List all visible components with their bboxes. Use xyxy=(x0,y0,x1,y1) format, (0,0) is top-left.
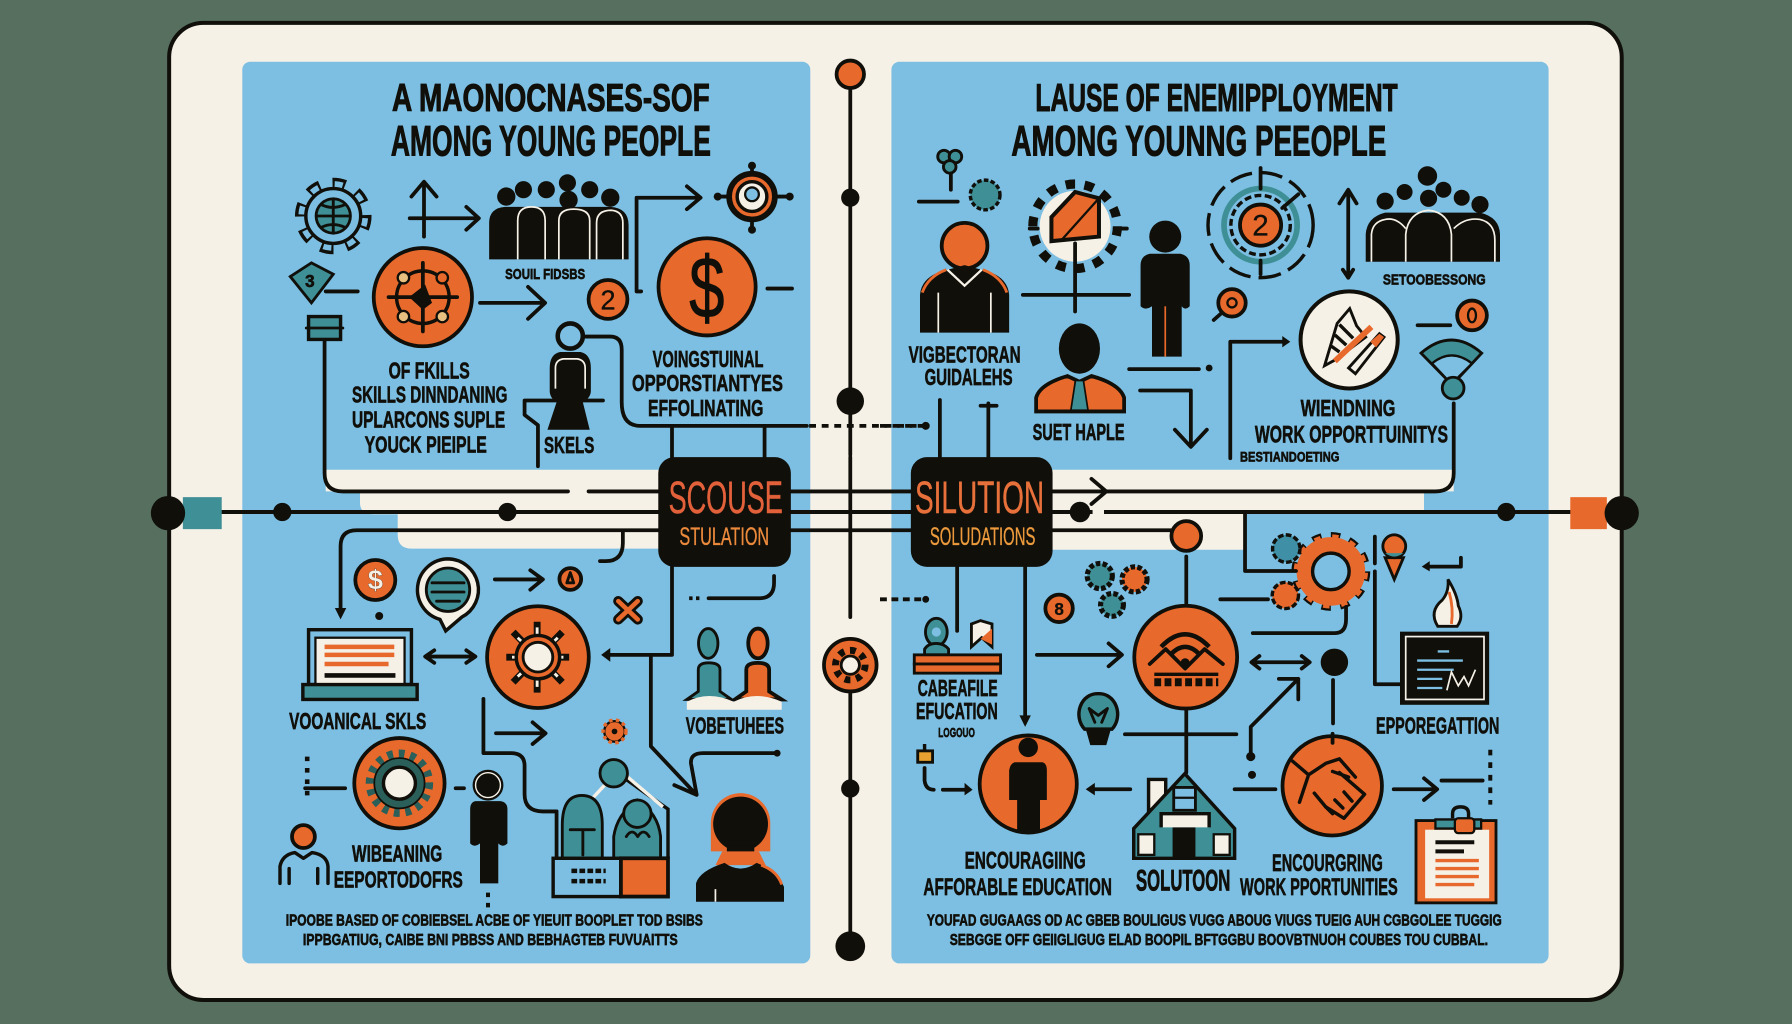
label: careable education xyxy=(916,675,998,740)
box: solution: SILUTION xyxy=(915,472,1044,523)
label: solution: SOLUTOON xyxy=(1136,864,1230,897)
icon: people group right xyxy=(1366,166,1500,262)
label: epporegation: EPPOREGATTION xyxy=(1376,713,1499,739)
label: careable education: CABEAFILE xyxy=(918,675,998,701)
text: widening opportunities xyxy=(334,841,463,892)
arrow: vertical double xyxy=(1339,190,1357,278)
heading: top right: AMONG YOUNNG PEEOPLE xyxy=(1011,117,1386,164)
icon: magnifier xyxy=(1214,289,1246,320)
label: group: SOUIL FIDSBS xyxy=(505,267,585,283)
label: careable education: LOGOUO xyxy=(938,726,975,740)
panel background: solutions xyxy=(891,62,1549,963)
icon: small person xyxy=(280,825,328,883)
arrow: pointing to gear xyxy=(1426,558,1461,567)
panel background: causes xyxy=(242,62,810,963)
icon: teal pendant xyxy=(290,263,358,303)
icon: target with 2 xyxy=(1208,168,1313,278)
icon: standing person with connectors xyxy=(525,323,928,466)
icon: number token xyxy=(1045,595,1073,622)
box: scouse: STULATION xyxy=(679,523,769,551)
text: skills xyxy=(352,357,507,458)
label: vocational skills: VOOANICAL SKLS xyxy=(289,708,426,734)
footer text: left xyxy=(286,913,703,949)
text: widening work opportunities: WORK OPPORTTUINITYS xyxy=(1255,421,1448,448)
connector: house to handshake xyxy=(1235,679,1298,789)
label: group right: SETOOBESSONG xyxy=(1383,273,1486,289)
arrow: to small token xyxy=(495,570,543,590)
text: encouraging affordable education xyxy=(923,848,1112,901)
icon: ice cream marker xyxy=(1383,535,1406,579)
icon: two figures xyxy=(687,629,782,710)
horizontal connectors xyxy=(183,339,1621,619)
icon: standing person xyxy=(1141,221,1190,357)
text: skills: UPLARCONS SUPLE xyxy=(352,406,505,432)
text: encouraging affordable education: AFFORABLE EDUCATION xyxy=(923,874,1112,901)
icon: clipboard xyxy=(1416,807,1496,903)
heading: top right xyxy=(1011,77,1398,164)
text: vocational opportunities: EFFOLINATING xyxy=(648,395,763,421)
icon: dollar coin xyxy=(659,238,792,337)
end marker: teal left xyxy=(151,496,222,530)
arrowhead xyxy=(1086,783,1095,795)
icon: teal pendant: 3 xyxy=(305,271,315,291)
arrow: cross xyxy=(410,182,479,237)
icon: person headphones xyxy=(696,793,784,902)
connector: chart xyxy=(1375,537,1402,684)
icon: number 2 badge xyxy=(589,280,627,319)
text: encouraging work opportunities: ENCOURGRING xyxy=(1272,850,1383,877)
icon: cream circle with pen xyxy=(1301,291,1398,388)
icon: dark chart panel xyxy=(1400,632,1489,705)
icon: plug with hook xyxy=(918,744,973,795)
heading: top left: A MAONOCNASES-SOF xyxy=(392,77,710,120)
arrow: elbow to target xyxy=(637,186,701,291)
icon: cluster of gears xyxy=(1087,563,1147,616)
icon: central gear node xyxy=(824,639,877,691)
heading: top left xyxy=(391,77,711,164)
icon: target with bulb xyxy=(714,162,794,234)
icon: house xyxy=(1134,774,1235,858)
central vertical timeline xyxy=(835,61,865,961)
icon: sunburst house xyxy=(1023,184,1129,312)
text: skills: YOUCK PIEIPLE xyxy=(365,432,487,458)
connector: elbow xyxy=(483,699,557,811)
icon: laptop xyxy=(303,630,417,699)
text: widening work opportunities: BESTIANDOETING xyxy=(1240,450,1339,465)
footer text: left: IPOOBE BASED OF COBIEBSEL ACBE OF YIEUIT BOOPLET TOD BSIBS xyxy=(286,913,703,930)
connector: hook xyxy=(600,531,623,561)
icon: small orange gear xyxy=(603,720,626,743)
label: skels: SKELS xyxy=(544,432,594,458)
arrow: to person xyxy=(480,287,545,319)
icon: double arrow and black node xyxy=(1251,649,1348,723)
connectors: solution box down xyxy=(880,567,1031,727)
label: vibrant guidance: GUIDALEHS xyxy=(925,364,1013,390)
panel: bottom left solutions xyxy=(280,531,784,949)
connector nodes xyxy=(273,502,1515,551)
icon: handshake circle xyxy=(1283,734,1382,836)
arrow and dashes right xyxy=(1394,750,1490,805)
arrowhead xyxy=(1422,561,1430,571)
icon: speech bubble xyxy=(417,559,478,631)
icon: orange network circle xyxy=(487,606,589,708)
heading: top left: AMONG YOUNG PEOPLE xyxy=(391,117,711,164)
icon: big gear xyxy=(1298,538,1364,605)
icon: wifi house circle xyxy=(1134,557,1237,709)
icon: light bulb xyxy=(1079,694,1118,745)
box: solution: SOLUDATIONS xyxy=(930,523,1035,551)
icon: teal gear circle xyxy=(354,738,445,828)
arrow: to wifi xyxy=(1037,643,1122,666)
icon: teacher at desk xyxy=(914,618,1001,673)
icon: dollar token: $ xyxy=(368,565,383,596)
heading: top right: LAUSE OF ENEMIPPLOYMENT xyxy=(1035,77,1398,120)
icon: orange x xyxy=(618,601,638,619)
text: widening work opportunities xyxy=(1240,395,1448,465)
text: encouraging work opportunities xyxy=(1240,850,1398,901)
text: encouraging work opportunities: WORK PPORTUNITIES xyxy=(1240,874,1398,901)
icon: number token: 8 xyxy=(1054,599,1064,619)
text: skills: SKILLS DINNDANING xyxy=(352,381,507,407)
box: solution xyxy=(911,457,1053,567)
label: opportunities: VOBETUHEES xyxy=(686,712,784,738)
box: scouse: SCOUSE xyxy=(669,472,783,523)
icon: book stack xyxy=(306,317,343,339)
footer text: left: IPPBGATIUG, CAIBE BNI PBBSS AND BEBHAGTEB FUVUAITTS xyxy=(303,932,678,949)
arrow: double laptop to virus xyxy=(425,650,475,663)
label: vibrant guidance: VIGBECTORAN xyxy=(909,341,1021,367)
icon: person orange head xyxy=(920,223,1009,333)
label: careable education: EFUCATION xyxy=(916,698,998,724)
footer text: right: SEBGGE OFF GEIIGLIGUG ELAD BOOPIL BFTGGBU BOOVBTNUOH COUBES TOU CUBBAL. xyxy=(950,932,1488,949)
icon: dollar token xyxy=(355,560,395,620)
icon: flame xyxy=(1434,579,1461,626)
icon: man with tie xyxy=(1036,323,1124,411)
panel: top right causes xyxy=(880,77,1500,465)
arrow: mid xyxy=(496,722,546,744)
footer text: right: YOUFAD GUGAAGS OD AC GBEB BOULIGUS VUGG ABOUG VIUGS TUEIG AUH CGBGOLEE TUGGIG xyxy=(927,913,1502,930)
end marker: orange right xyxy=(1570,496,1639,530)
card xyxy=(169,23,1622,1000)
connectors: big gear xyxy=(1220,513,1346,633)
text: vocational opportunities: OPPORSTIANTYES xyxy=(632,370,783,396)
icon: small token xyxy=(559,568,581,590)
icon: dollar coin: $ xyxy=(689,240,725,337)
text: skills: OF FKILLS xyxy=(389,357,470,383)
icon: teal wifi fan xyxy=(1421,340,1482,399)
arrows: mid right xyxy=(1129,336,1290,458)
panel: bottom right solutions xyxy=(880,513,1502,949)
arrow: house to person xyxy=(1090,788,1130,791)
label: vibrant guidance xyxy=(909,341,1021,390)
icon: people group xyxy=(489,174,629,259)
panel: top left causes xyxy=(290,77,928,466)
box: scouse xyxy=(658,457,791,567)
icon: small plant xyxy=(919,150,1000,210)
icon: target with 2: 2 xyxy=(1252,209,1269,242)
text: encouraging affordable education: ENCOURAGIING xyxy=(965,848,1086,875)
label: suet haple: SUET HAPLE xyxy=(1033,419,1125,445)
icon: orange person circle xyxy=(980,735,1077,833)
text: vocational opportunities xyxy=(632,346,783,421)
icon: booth with two figures xyxy=(553,760,668,897)
footer text: right xyxy=(927,913,1502,949)
icon: small gears by big gear xyxy=(1272,535,1300,609)
text: vocational opportunities: VOINGSTUINAL xyxy=(653,346,763,372)
icon: person cream ring xyxy=(470,771,507,909)
text: widening work opportunities: WIENDNING xyxy=(1301,395,1395,421)
connector: scouse box down xyxy=(601,567,781,795)
icon: orange target circle xyxy=(374,248,472,346)
connectors: solution box up xyxy=(880,400,997,457)
icon: orange token xyxy=(1418,301,1487,330)
icon: gear with globe xyxy=(304,186,363,246)
text: widening opportunities: WIBEANING xyxy=(352,841,442,867)
text: widening opportunities: EEPORTODOFRS xyxy=(334,866,463,892)
connectors: wifi to house xyxy=(1125,710,1236,773)
dashes: left of gear circle xyxy=(305,757,464,798)
icon: number 2 badge: 2 xyxy=(600,285,616,316)
